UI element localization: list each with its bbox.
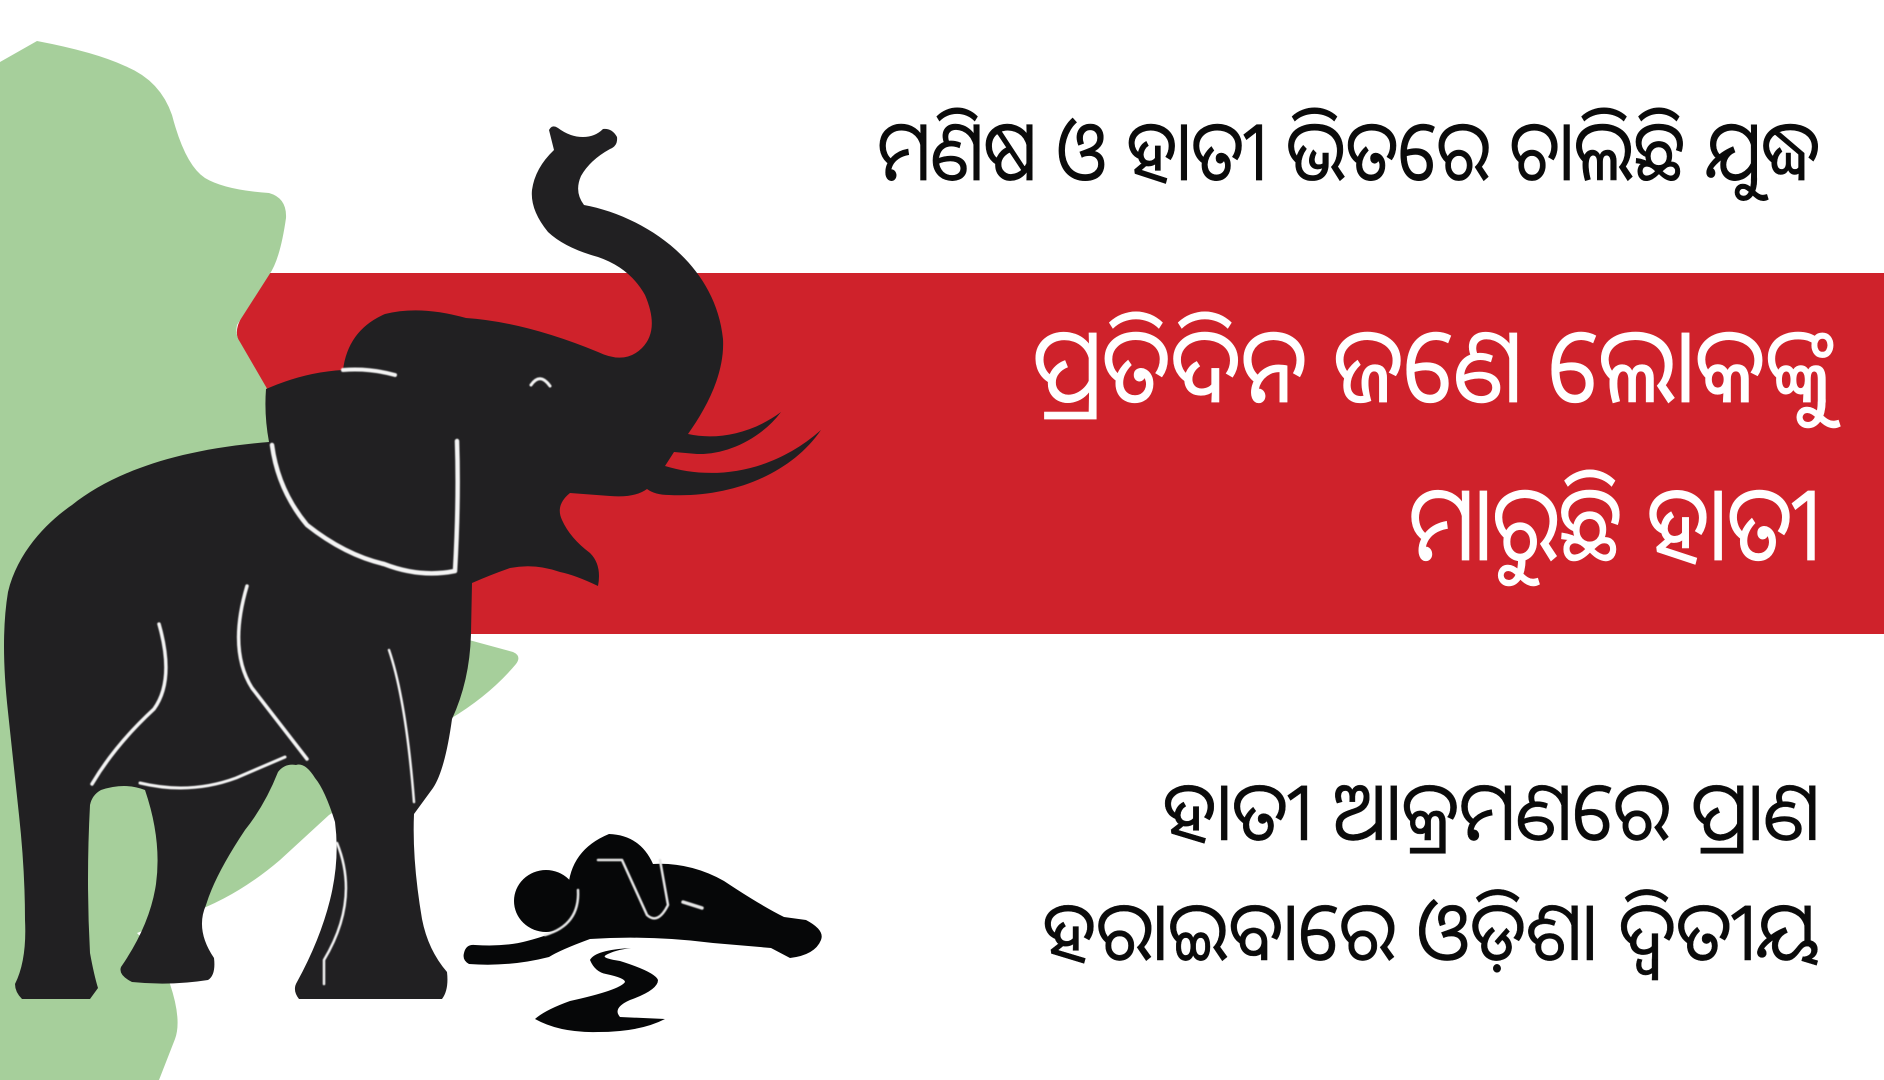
text: bottom line 2: ହରାଇବାରେ ଓଡ଼ିଶା ଦ୍ୱିତୀୟ bbox=[1043, 885, 1820, 981]
person white contour lines bbox=[545, 860, 702, 935]
person body bbox=[464, 834, 822, 965]
headline: banner line 1: ପ୍ରତିଦିନ ଜଣେ ଲୋକଙ୍କୁ bbox=[1033, 308, 1841, 428]
green map of Odisha bbox=[0, 41, 518, 1080]
headline: banner line 2: ମାରୁଛି ହାତୀ bbox=[1409, 465, 1820, 587]
text: bottom line 1: ହାତୀ ଆକ୍ରମଣରେ ପ୍ରାଣ bbox=[1163, 765, 1820, 858]
elephant silhouette bbox=[4, 126, 821, 999]
icon: elephant bbox=[4, 126, 821, 999]
person head bbox=[514, 870, 578, 932]
heading: top line: ମଣିଷ ଓ ହାତୀ ଭିତରେ ଚାଲିଛି ଯୁଦ୍ଧ bbox=[878, 104, 1820, 202]
elephant white contour lines bbox=[92, 370, 550, 984]
icon: fallen person bbox=[464, 834, 822, 1032]
red banner bbox=[237, 273, 1884, 634]
blood pool bbox=[535, 948, 665, 1032]
